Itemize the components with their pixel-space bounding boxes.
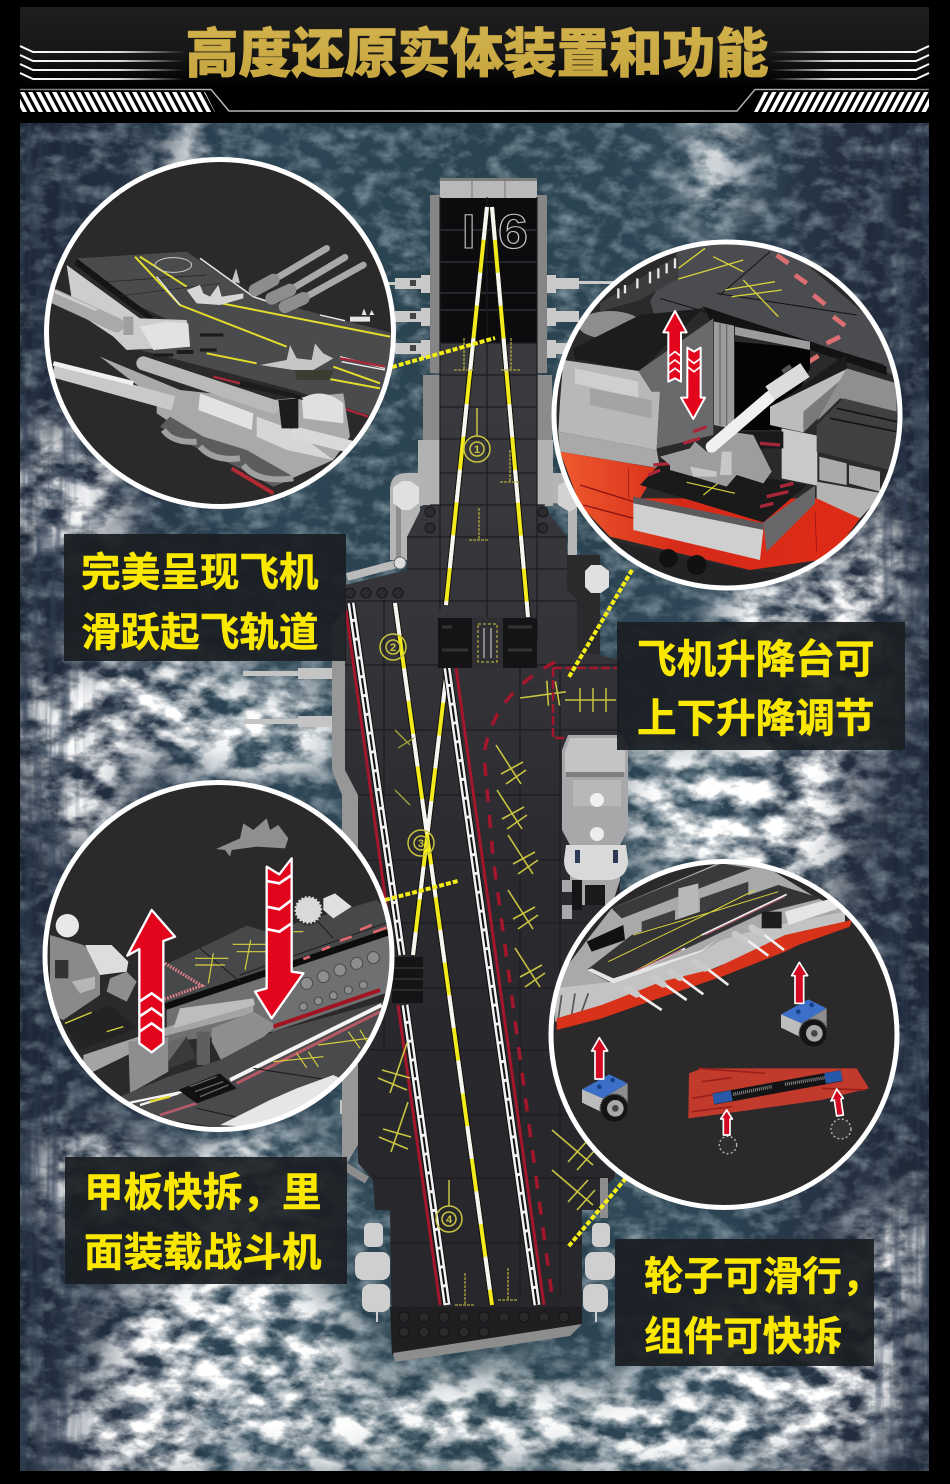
ship body [555, 862, 845, 1022]
raised gun [712, 397, 770, 447]
wheel block right [781, 999, 827, 1023]
stern stud section [390, 1307, 582, 1362]
wheel block left [582, 1074, 628, 1098]
double arrows [663, 311, 687, 382]
white outer mounts [220, 1075, 343, 1128]
midship elevator blocks [392, 618, 537, 1003]
dark lift shaft [735, 342, 810, 430]
red safety lines [346, 610, 544, 1305]
catapult tracks [351, 603, 537, 1305]
right speed lines [770, 46, 929, 79]
grey hull strip [555, 912, 845, 1020]
header banner [20, 7, 929, 112]
callout: removable deck: 面装载战斗机 [84, 1231, 322, 1275]
deck markings [678, 248, 782, 317]
left hatch band [20, 92, 215, 112]
callout: ski jump track: 完美呈现飞机 [81, 551, 319, 595]
callout: ski jump track [64, 534, 346, 661]
left speed lines [20, 46, 185, 79]
numbered spot markers [380, 408, 490, 1232]
black platform [573, 308, 703, 371]
bow lip [440, 178, 537, 198]
walkway and pillars [83, 1006, 254, 1072]
leader line: ski jump [392, 338, 495, 367]
upper deck [650, 238, 897, 375]
big down arrow [255, 858, 303, 1018]
aircraft parking markers [378, 338, 595, 1305]
hull number [462, 206, 528, 259]
callout: wheels: 组件可快拆 [644, 1315, 842, 1359]
right sponson block [567, 555, 600, 655]
callout: wheels [615, 1239, 881, 1366]
circle detail: ski jump bow [46, 159, 394, 507]
red hull [557, 920, 852, 1030]
side gun mounts [243, 275, 627, 1114]
title: 高度还原实体装置和功能 [186, 24, 768, 84]
numbered spot markers: 3 [418, 838, 424, 850]
right hatch band [754, 92, 929, 112]
right lift block [780, 355, 847, 405]
header frame line [20, 90, 929, 111]
island superstructure [562, 735, 628, 919]
upper deck [165, 900, 390, 1007]
big up arrow [127, 910, 175, 1052]
ramp arm and bollards [347, 480, 609, 593]
callout: aircraft elevator: 上下升降调节 [637, 697, 874, 741]
small loose wheels [719, 1136, 737, 1154]
bow ramp deck [77, 252, 393, 417]
front left mount [67, 265, 190, 350]
front gun barrels [53, 370, 173, 403]
flight deck [345, 198, 620, 1355]
lower grey side wall [167, 932, 390, 1042]
island corner [50, 935, 100, 1020]
stair grate [178, 1073, 237, 1103]
red hull section part [688, 1068, 869, 1118]
crossing runway lines [395, 603, 492, 1305]
parked jets [187, 285, 243, 305]
red elevator outline [553, 668, 620, 738]
circle detail: lift platform [554, 238, 900, 588]
circle detail: removable deck [44, 782, 392, 1130]
small red arrows [592, 962, 843, 1135]
numbered spot markers: 4 [446, 1214, 453, 1226]
flying jet [216, 818, 288, 857]
lower deck [120, 1002, 383, 1128]
jet on lift [660, 432, 772, 487]
deck studs [345, 507, 548, 598]
left walls [558, 360, 660, 450]
callout: removable deck: 甲板快拆，里 [84, 1171, 321, 1215]
leader line: wheels [568, 1178, 626, 1247]
callout: aircraft elevator [617, 622, 905, 750]
stern fixtures [343, 1163, 615, 1322]
lower hull structure [100, 357, 350, 487]
callout: wheels: 轮子可滑行， [644, 1255, 881, 1299]
deck panel grid [440, 230, 537, 310]
black bow section [440, 197, 537, 343]
lifted deck platform [640, 460, 807, 522]
island base [580, 311, 636, 338]
leader line: deck [385, 881, 458, 900]
aircraft carrier top view [243, 178, 628, 1362]
flight deck surface [587, 885, 822, 983]
callout: ski jump track: 滑跃起飞轨道 [81, 611, 318, 655]
under hull [620, 543, 781, 577]
red dashed boundary [484, 662, 555, 1303]
callout: removable deck [65, 1157, 347, 1284]
lift pillar [714, 322, 734, 429]
leader line: elevator [569, 570, 632, 677]
gear parts [294, 896, 322, 924]
numbered spot markers: 2 [390, 642, 396, 654]
red hull [560, 452, 860, 570]
white gun barrels [632, 929, 784, 1010]
grey hull band [558, 432, 660, 468]
callout: aircraft elevator: 飞机升降台可 [637, 638, 874, 682]
ski jump runway lines [446, 207, 528, 617]
hull number: I [462, 206, 475, 259]
circle detail: wheels and parts [551, 862, 897, 1208]
numbered spot markers: 1 [474, 444, 480, 456]
hull number: 6 [498, 206, 528, 259]
rear gun barrels [255, 248, 363, 307]
outrigger rails [332, 195, 577, 1163]
